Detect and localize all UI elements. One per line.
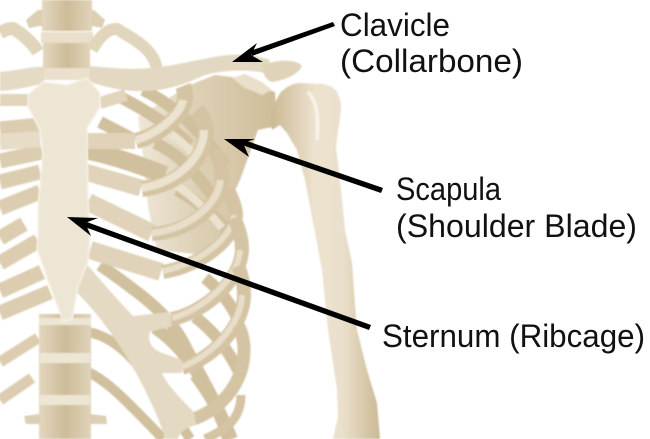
front ribs, right side	[85, 86, 244, 439]
rib cartilage three	[85, 172, 141, 188]
sternum	[28, 78, 100, 321]
lower vertebra wings	[24, 414, 107, 424]
humerus	[271, 83, 380, 439]
spine	[24, 0, 107, 439]
left ribs	[0, 125, 50, 400]
left clavicle	[0, 67, 44, 91]
rib cartilage four	[88, 202, 152, 233]
rib cartilage five	[90, 250, 161, 272]
rib arc eight	[194, 325, 244, 419]
acromion	[263, 61, 302, 82]
rib arc seven	[182, 266, 244, 368]
skeleton illustration	[0, 0, 380, 439]
rib arc four	[152, 150, 222, 234]
spine discs	[39, 318, 91, 405]
arrow: scapula	[224, 139, 383, 193]
label: scapula: Scapula	[396, 171, 501, 207]
left front rib	[0, 139, 40, 142]
lower spine	[39, 314, 91, 439]
label: sternum: Sternum (Ribcage)	[382, 318, 645, 354]
rib arc three	[142, 110, 206, 189]
light rib bands over scapula	[165, 132, 222, 228]
arrow: clavicle	[232, 22, 335, 62]
scapula	[138, 75, 277, 255]
left first rib	[0, 28, 38, 52]
right first rib	[92, 29, 157, 72]
clavicle joint band	[42, 68, 92, 80]
rib arc five	[163, 190, 236, 272]
vertebrae upper	[42, 0, 92, 31]
rib arc nine	[205, 395, 241, 439]
scapula coracoid ridge	[232, 74, 272, 95]
label: collarbone: (Collarbone)	[340, 43, 523, 79]
disc upper	[41, 32, 93, 43]
rib arc six	[172, 218, 242, 319]
rib arc two	[136, 86, 185, 141]
upper rib connectors	[0, 95, 126, 103]
humerus head highlight	[308, 92, 318, 140]
rib cartilage two	[85, 133, 135, 149]
right clavicle	[90, 55, 270, 91]
back ribs, right side	[85, 90, 238, 439]
vertebra wings top	[26, 10, 105, 28]
first ribs	[0, 28, 157, 72]
label: shoulder blade: (Shoulder Blade)	[396, 208, 637, 244]
label: clavicle: Clavicle	[340, 7, 450, 43]
costal cartilage mass	[76, 262, 196, 439]
vertebra lower neck	[43, 43, 90, 69]
arrow: sternum	[67, 217, 371, 330]
